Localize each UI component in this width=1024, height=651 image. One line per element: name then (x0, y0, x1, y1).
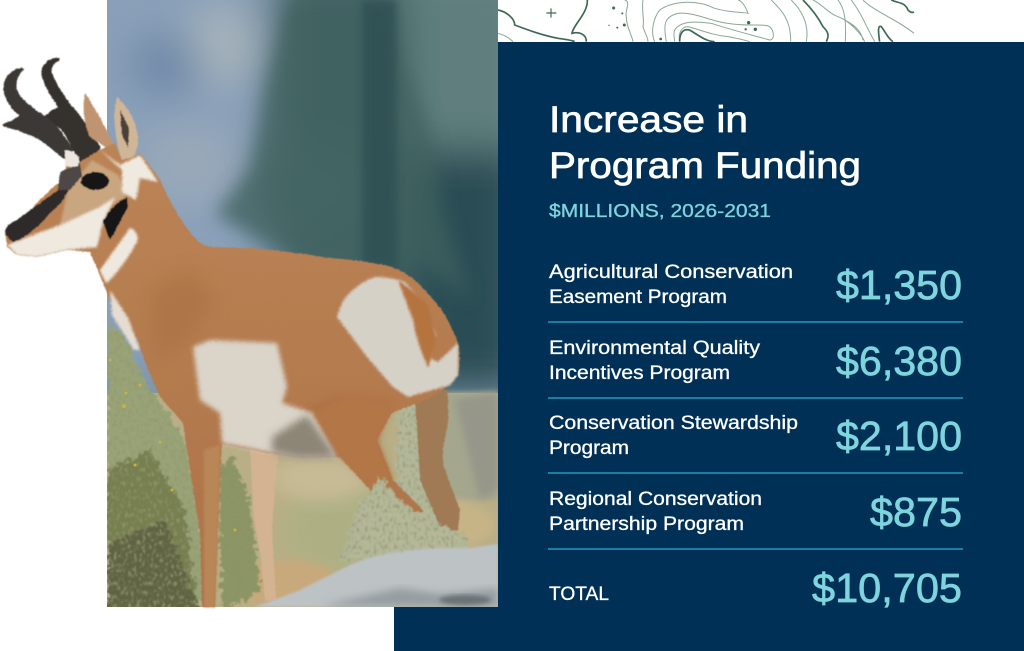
contour lines (643, 0, 748, 42)
eye (81, 172, 109, 190)
subtitle: $MILLIONS, 2026-2031 (549, 201, 771, 221)
topographic map fragment (498, 0, 914, 42)
white horn base (65, 150, 79, 167)
white neck patch beside ear (100, 150, 158, 200)
row: Environmental Quality Incentives Program: Incentives Program (549, 363, 730, 384)
row: Conservation Stewardship Program: $2,100 (836, 413, 962, 459)
row: Agricultural Conservation Easement Program (549, 262, 962, 308)
navy panel (394, 42, 1024, 651)
photo background: blurred forest and meadow (107, 0, 498, 607)
white belly patch (193, 340, 337, 458)
pronghorn antelope (4, 59, 460, 607)
dark nose blaze (5, 187, 70, 242)
row: Regional Conservation Partnership Program (549, 489, 962, 535)
title (549, 99, 861, 186)
row: Conservation Stewardship Program: Conservation Stewardship (549, 413, 798, 434)
foreground grass and rock (254, 475, 498, 607)
antelope body silhouette (5, 143, 460, 607)
yellow blossoms on bush (108, 358, 236, 532)
row: Conservation Stewardship Program: Program (549, 438, 629, 459)
row: Conservation Stewardship Program (549, 413, 962, 459)
title: Program Funding (549, 145, 861, 186)
sprigs overlapping hind hoof (371, 476, 469, 548)
blurred conifer tree (215, 0, 470, 300)
row: total: TOTAL (549, 584, 609, 605)
row: Environmental Quality Incentives Program (549, 338, 962, 384)
map dots (608, 6, 757, 40)
row: Agricultural Conservation Easement Program: Easement Program (549, 287, 727, 308)
front of chest white edge (110, 290, 140, 350)
white throat band (100, 228, 138, 283)
tan cheek (60, 160, 128, 225)
grey lower belly (272, 415, 337, 458)
row: Regional Conservation Partnership Program: Partnership Program (549, 514, 744, 535)
row: Regional Conservation Partnership Program: $875 (870, 489, 962, 535)
row: total: $10,705 (812, 565, 962, 611)
map plus marker (546, 8, 556, 18)
row: total (549, 565, 962, 611)
row: Agricultural Conservation Easement Program: Agricultural Conservation (549, 262, 793, 283)
far hind leg (413, 383, 460, 531)
far front leg (250, 446, 278, 600)
tan ground right (457, 500, 493, 544)
granite rock (254, 544, 498, 607)
row: Regional Conservation Partnership Program: Regional Conservation (549, 489, 762, 510)
thick index contours (498, 0, 914, 42)
row: Environmental Quality Incentives Program: Environmental Quality (549, 338, 761, 359)
horn left (4, 69, 72, 158)
row: Environmental Quality Incentives Program: $6,380 (836, 338, 962, 384)
near thigh over belly (313, 395, 393, 488)
ear (114, 97, 138, 160)
title: Increase in (549, 99, 748, 140)
sagebrush bush (107, 325, 470, 612)
near front leg highlight (204, 445, 220, 607)
white rump patch (337, 277, 458, 397)
dark forehead strip (58, 163, 82, 190)
darker flank shading (300, 395, 392, 480)
black cheek patch (103, 197, 128, 240)
white face (7, 197, 115, 257)
row: Agricultural Conservation Easement Program: $1,350 (836, 262, 962, 308)
horn right (43, 59, 99, 163)
meadow ground (107, 393, 498, 607)
ear-side tan horn prong (84, 93, 113, 150)
